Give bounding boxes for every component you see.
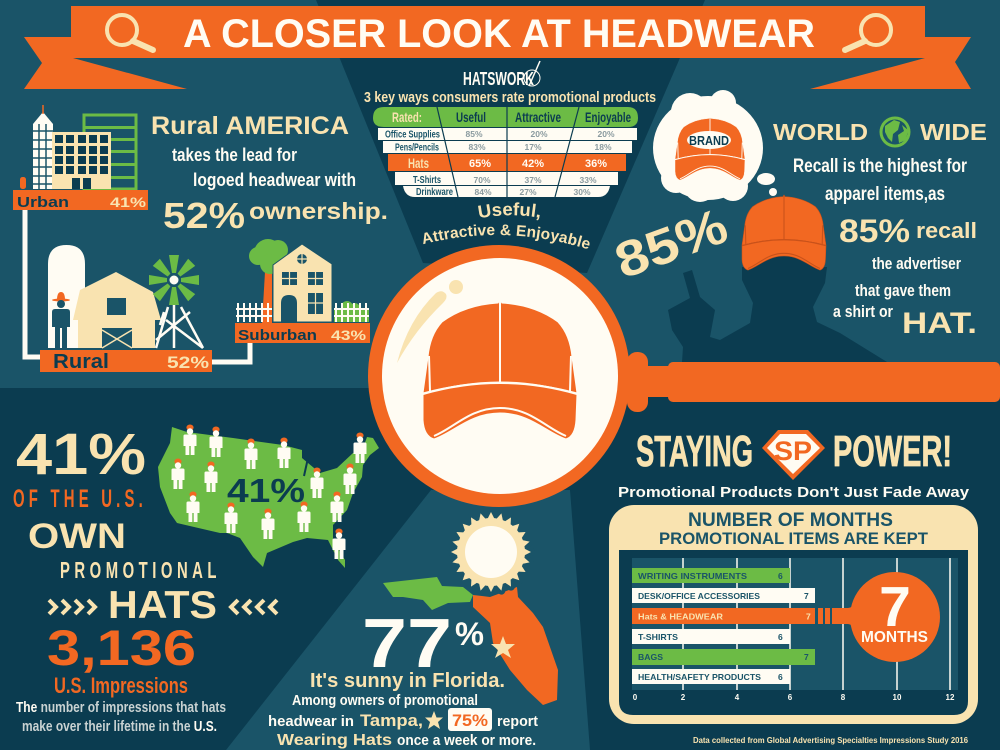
bar: hats and headwear	[632, 608, 815, 624]
icon: brand cap	[675, 117, 745, 180]
body text: report	[497, 713, 538, 730]
body text: that gave them	[855, 281, 951, 300]
bar: desk and office accessories: DESK/OFFICE ACCESSORIES	[638, 591, 760, 601]
title banner	[24, 6, 971, 89]
ratings table: 37%	[524, 175, 542, 185]
icon: cap	[423, 300, 577, 439]
body text: 75%	[452, 711, 488, 730]
ratings table: Pens/Pencils	[395, 142, 439, 154]
stat: 85% recall: recall	[916, 218, 977, 243]
label: urban: Urban	[17, 194, 69, 211]
body text: a shirt or	[833, 302, 893, 321]
ratings table: Hats	[408, 155, 429, 171]
bar: health and safety products: HEALTH/SAFETY PRODUCTS	[638, 672, 761, 682]
body text	[268, 692, 538, 749]
heading: It's sunny in Florida.	[310, 670, 505, 692]
heading	[636, 427, 952, 476]
axis labels: 10	[893, 693, 902, 702]
stat: 77%: 77	[362, 604, 452, 682]
heading: Rural AMERICA	[151, 112, 349, 140]
icon: SP shield	[762, 430, 825, 480]
bar: t-shirts: T-SHIRTS	[638, 632, 678, 642]
heading: STAYING	[636, 427, 753, 476]
label: suburban: 43%	[331, 327, 367, 343]
label: rural	[40, 350, 212, 373]
text: hats with chevrons	[49, 584, 277, 627]
icon: brand cap: BRAND	[689, 133, 729, 148]
curved caption: Useful,	[478, 202, 540, 220]
axis labels: 12	[946, 693, 955, 702]
ratings table: 20%	[597, 129, 615, 139]
icon: left magnifier	[107, 15, 153, 50]
panel: rural america	[13, 105, 388, 373]
heading: world wide: WIDE	[920, 119, 987, 145]
axis labels: 2	[681, 693, 686, 702]
ratings table: Drinkware	[416, 186, 453, 198]
stat: 41%: 41%	[16, 422, 146, 487]
ratings table: 27%	[519, 187, 537, 197]
body text: Wearing Hats	[277, 732, 392, 749]
ratings table: Useful	[456, 109, 486, 125]
stat: 52% ownership: 52%	[163, 195, 245, 236]
axis labels: 4	[735, 693, 740, 702]
label: urban	[13, 190, 148, 211]
bar: health and safety products	[632, 669, 790, 684]
axis labels: 0	[633, 693, 638, 702]
body text: Tampa,	[360, 711, 423, 730]
source note: Data collected from Global Advertising Specialties Impressions Study 2016	[693, 736, 969, 745]
ratings table: 42%	[522, 158, 544, 170]
magnifier handle	[620, 352, 1000, 412]
axis labels	[633, 693, 955, 702]
ratings table: T-Shirts	[413, 174, 441, 186]
chart title: NUMBER OF MONTHS	[688, 510, 893, 531]
stat: 77%	[362, 604, 484, 682]
bar: bags: BAGS	[638, 652, 663, 662]
ratings table: Office Supplies	[385, 128, 440, 140]
body text: once a week or more.	[397, 732, 536, 749]
stat: 52% ownership: ownership.	[249, 198, 388, 224]
table rows	[378, 128, 637, 197]
subheading: Promotional Products Don't Just Fade Away	[618, 484, 970, 501]
bar: writing instruments: 6	[778, 571, 783, 581]
body text	[16, 700, 226, 735]
ratings table	[373, 107, 638, 198]
icon: globe	[880, 116, 910, 148]
icon: thought cloud	[653, 90, 777, 202]
magnifier lens	[368, 245, 630, 507]
axis labels: 8	[841, 693, 846, 702]
chart card	[609, 505, 978, 724]
ratings table: 65%	[469, 158, 491, 170]
body text	[793, 155, 967, 321]
chart title	[659, 510, 929, 548]
bar: writing instruments	[632, 568, 790, 583]
panel: staying power	[609, 427, 978, 745]
body text: make over their lifetime in the U.S.	[22, 719, 217, 735]
icon: suburban house	[236, 239, 369, 323]
silhouette with cap	[668, 195, 887, 362]
stat: 85% recall	[839, 213, 977, 340]
text: hats with chevrons: HATS	[108, 584, 217, 627]
ratings table: 36%	[585, 158, 607, 170]
table header	[373, 107, 638, 127]
title: A CLOSER LOOK AT HEADWEAR	[183, 12, 815, 56]
icon: farm	[48, 245, 203, 348]
ratings table: 33%	[579, 175, 597, 185]
curved caption: Attractive & Enjoyable	[423, 224, 590, 249]
body text: Among owners of promotional	[292, 692, 478, 709]
body text: headwear in	[268, 713, 354, 730]
body text: apparel items,as	[825, 183, 945, 205]
callout: 7 months: 7	[879, 575, 911, 639]
ratings table: Enjoyable	[585, 109, 631, 125]
ratings table: 17%	[524, 142, 542, 152]
panel: world wide recall	[608, 90, 987, 362]
label: suburban: Suburban	[238, 327, 317, 344]
label: rural: 52%	[167, 353, 209, 372]
lens highlight	[397, 280, 463, 363]
icon: city buildings	[20, 105, 136, 189]
logo: Hatswork: HATSWORK	[463, 69, 534, 89]
stat: rotated 85%: 85%	[608, 197, 735, 289]
bar: bags	[632, 649, 815, 665]
panel: US ownership	[13, 422, 379, 735]
magnifying glass with cap	[368, 245, 1000, 507]
panel: Florida	[268, 512, 558, 749]
bar: desk and office accessories	[632, 588, 815, 603]
panel: consumer ratings	[364, 60, 656, 249]
text: own: OWN	[28, 517, 126, 556]
body text: logoed headwear with	[193, 169, 356, 190]
stat: 85% recall: HAT.	[902, 307, 977, 340]
ratings table: 18%	[594, 142, 612, 152]
body text: the advertiser	[872, 254, 961, 273]
label: urban: 41%	[110, 194, 147, 210]
bar: desk and office accessories: 7	[804, 591, 809, 601]
ratings table: 85%	[465, 129, 483, 139]
heading: world wide	[773, 119, 987, 145]
text: impressions: U.S. Impressions	[54, 673, 188, 698]
heading: world wide: WORLD	[773, 119, 868, 145]
banner ribbon	[71, 6, 925, 58]
stat: 85% recall: 85%	[839, 213, 910, 249]
icon: right magnifier	[845, 15, 891, 50]
banner tails	[24, 37, 971, 89]
stat: 3,136: 3,136	[47, 620, 196, 676]
subtitle: 3 key ways consumers rate promotional products	[364, 89, 656, 106]
bar: writing instruments: WRITING INSTRUMENTS	[638, 571, 747, 581]
icon: SP shield: SP	[774, 436, 812, 466]
logo: Hatswork	[463, 61, 540, 89]
ratings table: 84%	[474, 187, 492, 197]
map: United States	[158, 424, 379, 568]
callout: 7 months: MONTHS	[861, 629, 928, 646]
bar chart	[619, 550, 968, 715]
ratings table: 83%	[468, 142, 486, 152]
body text	[172, 144, 356, 190]
map: Florida	[383, 577, 558, 705]
connector lines	[25, 210, 250, 362]
label: suburban	[235, 323, 370, 344]
bar: health and safety products: 6	[778, 672, 783, 682]
ratings table: 70%	[473, 175, 491, 185]
bar: hats and headwear: Hats & HEADWEAR	[638, 612, 723, 622]
stat: 77%: %	[455, 616, 484, 652]
stat: 52% ownership	[163, 195, 388, 236]
label: rural: Rural	[53, 351, 109, 373]
body text: The number of impressions that hats	[16, 700, 226, 716]
ratings table: 20%	[530, 129, 548, 139]
ratings table: Attractive	[515, 109, 561, 125]
icon: sun	[451, 512, 531, 592]
map stat: 41%	[227, 472, 305, 509]
text: of the U.S.: OF THE U.S.	[13, 485, 147, 513]
bar: t-shirts: 6	[778, 632, 783, 642]
text: promotional: PROMOTIONAL	[60, 557, 221, 583]
chart title: PROMOTIONAL ITEMS ARE KEPT	[659, 529, 929, 548]
curved caption	[423, 202, 590, 249]
ratings table: 30%	[573, 187, 591, 197]
callout: 7 months	[818, 572, 940, 662]
bar: t-shirts	[632, 629, 790, 644]
ratings table: Rated:	[392, 109, 422, 125]
bar: bags: 7	[804, 652, 809, 662]
icons: people in hats	[172, 424, 366, 559]
axis labels: 6	[788, 693, 793, 702]
body text: takes the lead for	[172, 144, 297, 165]
bar: hats and headwear: 7	[806, 612, 811, 622]
